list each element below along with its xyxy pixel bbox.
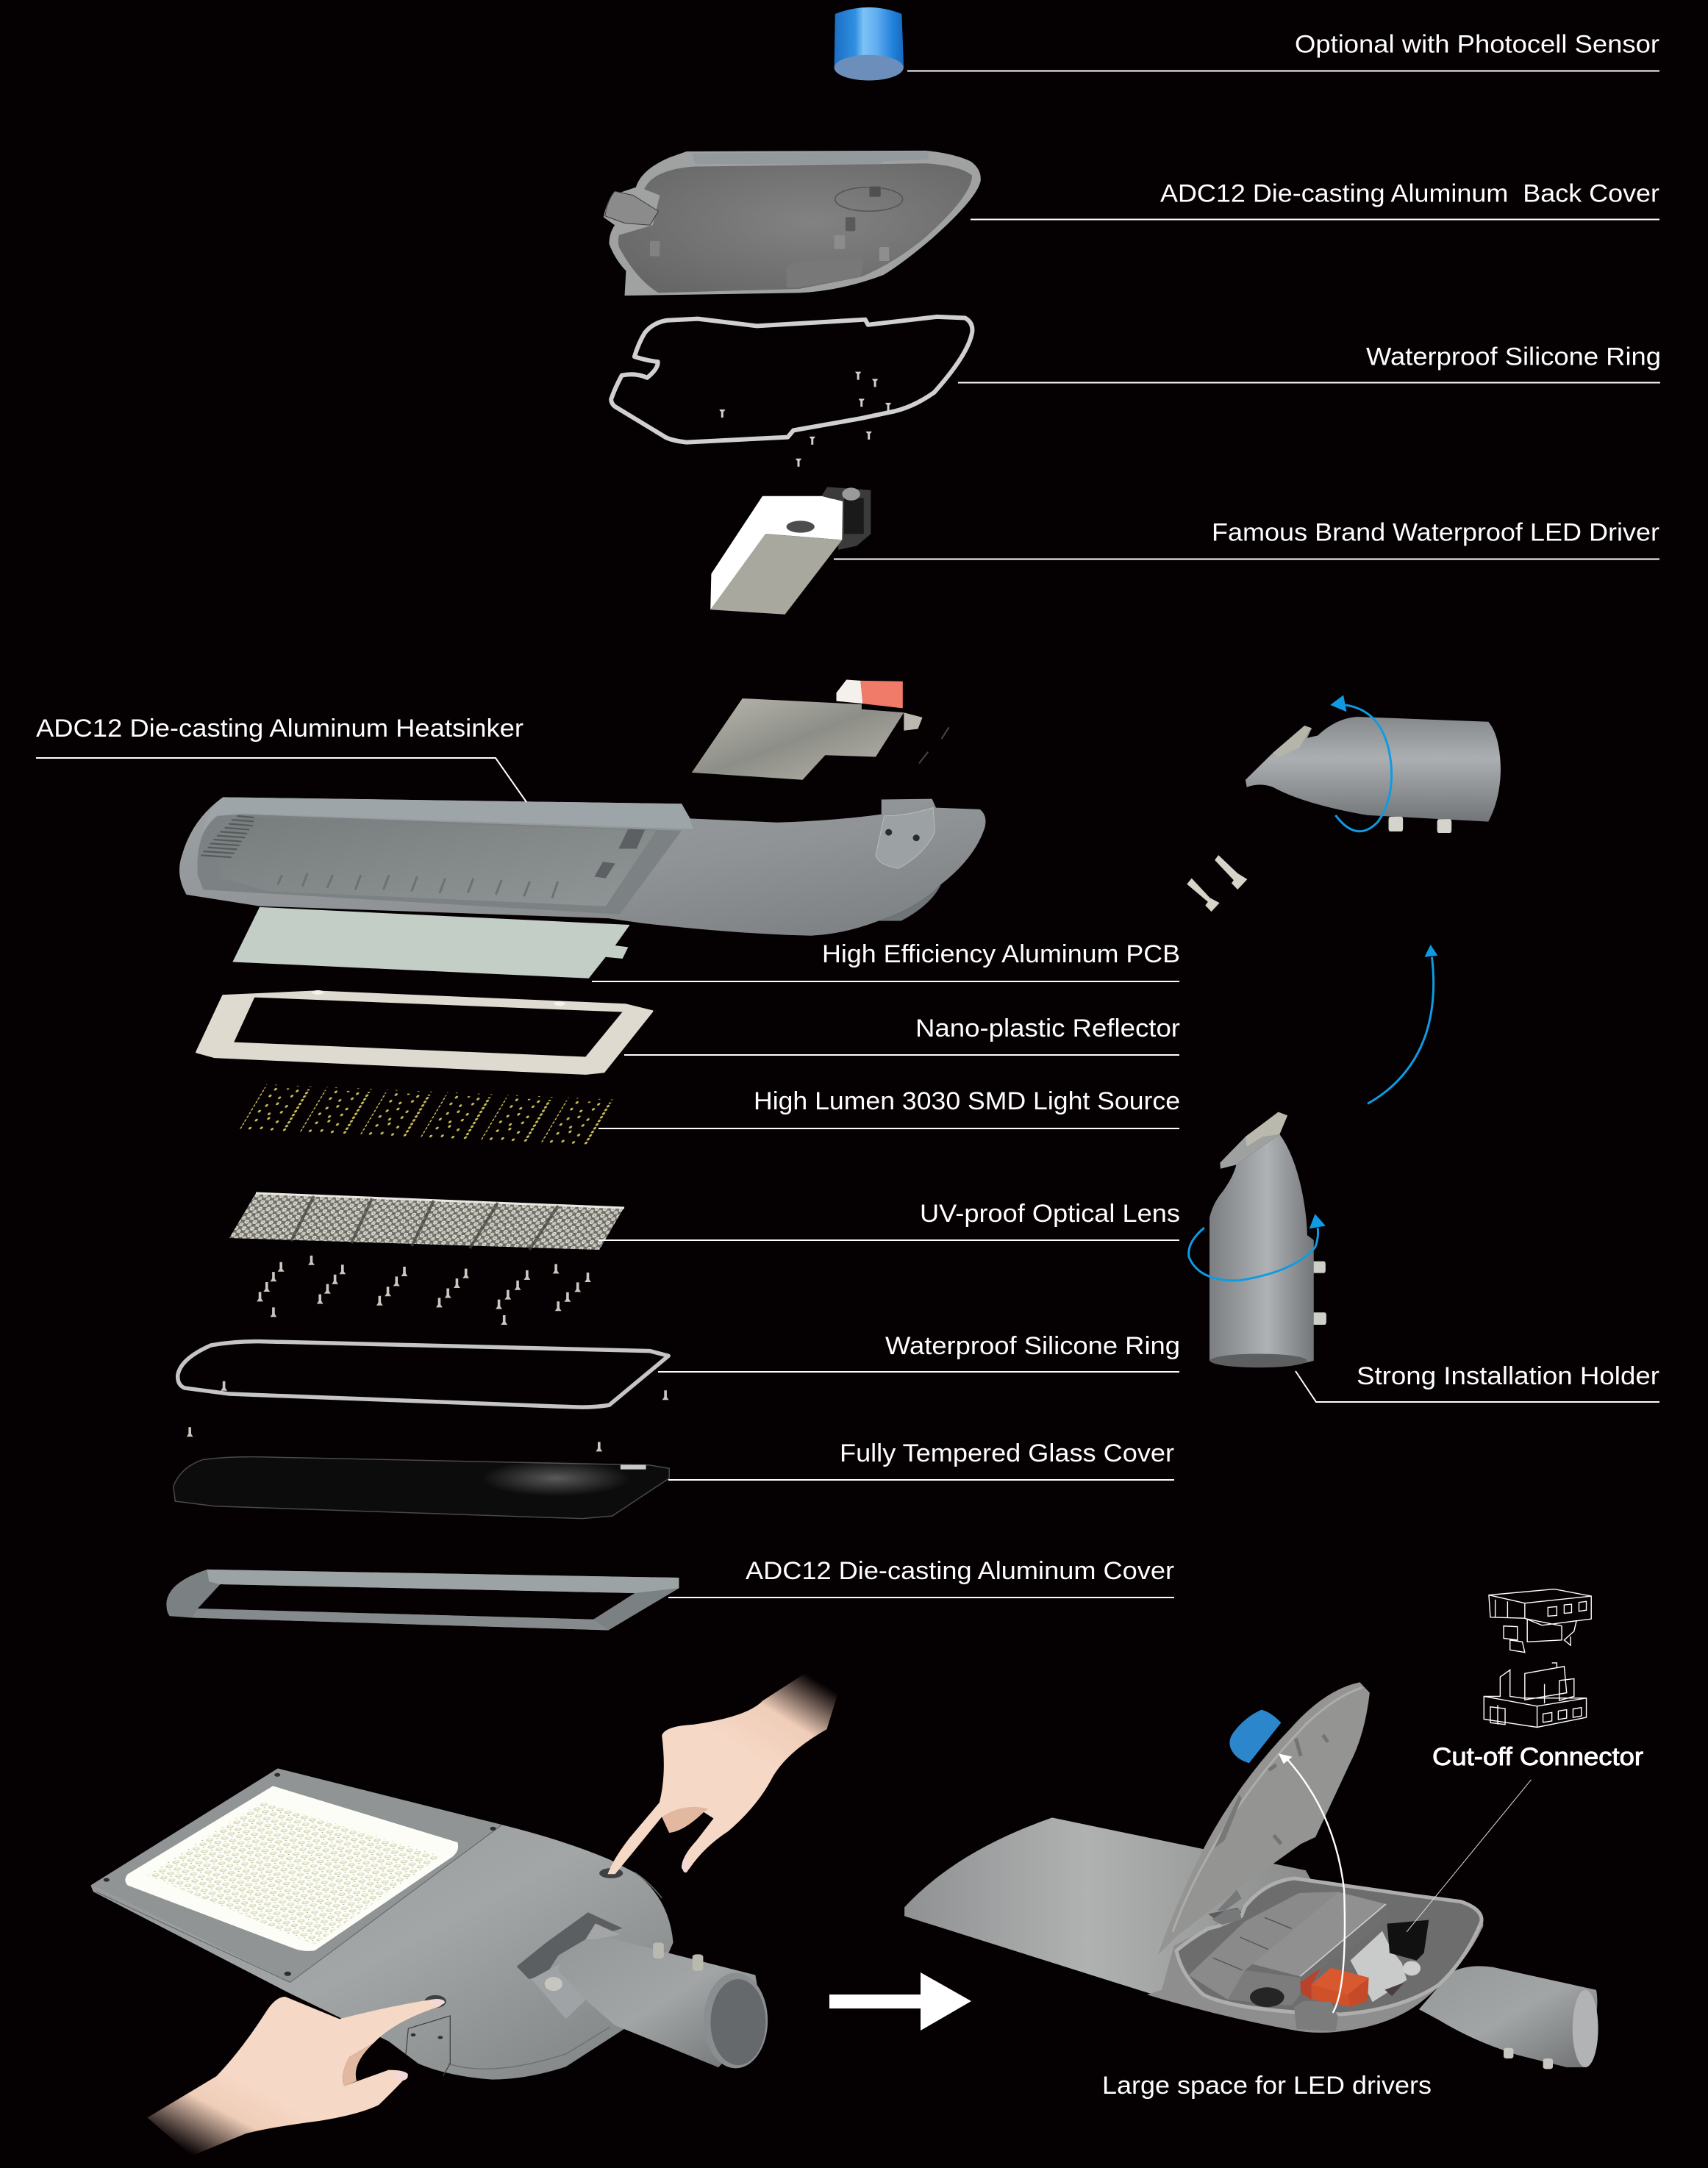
- finger hand lower: [147, 1997, 445, 2156]
- mounting recess: [517, 1912, 623, 1979]
- part: nano-plastic reflector: [196, 990, 652, 1074]
- mounting pipe: [1419, 1966, 1597, 2067]
- mounting pipe: [559, 1939, 762, 2067]
- part: aluminum PCB: [232, 907, 630, 979]
- label: LED driver: Famous Brand Waterproof LED Driver: [1212, 519, 1659, 547]
- icon: two mounting bolts: [1187, 855, 1247, 912]
- part: waterproof LED driver: [710, 487, 871, 615]
- red capacitor: [1300, 1968, 1321, 2000]
- part: aluminum back cover: [604, 151, 981, 296]
- flat heatsink panel: [904, 1817, 1311, 2031]
- heatsink vent fins: [201, 816, 254, 857]
- label: light source: High Lumen 3030 SMD Light Source: [754, 1087, 1180, 1115]
- part: horizontal installation holder with rotation arrow: [1246, 695, 1501, 833]
- part: UV-proof optical lens: [229, 1193, 624, 1250]
- luminaire body: [90, 1769, 673, 2080]
- part: aluminum heatsinker housing: [179, 797, 985, 936]
- label: aluminum PCB: High Efficiency Aluminum PCB: [822, 940, 1180, 968]
- icon: cut-off connector lower wireframe: [1484, 1663, 1587, 1727]
- label: heatsinker: [36, 715, 526, 802]
- label: photocell sensor: Optional with Photocell Sensor: [1295, 31, 1659, 59]
- arrow: blue rotation arc bottom: [1189, 1214, 1326, 1281]
- black cut-off connector: [1387, 1920, 1429, 1961]
- illustration: opened lid and connector details: [1158, 1589, 1591, 2013]
- white opening arrow: [1279, 1753, 1345, 2013]
- lens fixing screws: [187, 1256, 669, 1451]
- label: upper silicone ring: Waterproof Silicone Ring: [1366, 343, 1661, 371]
- icon: cut-off connector upper wireframe: [1489, 1589, 1591, 1653]
- illustration: opened luminaire base and pipe: [904, 1817, 1598, 2069]
- part: fully tempered glass cover: [174, 1457, 669, 1519]
- illustration: closed luminaire with two hands: [90, 1669, 846, 2156]
- label: aluminum cover: ADC12 Die-casting Aluminum Cover: [746, 1557, 1174, 1585]
- label: glass cover: Fully Tempered Glass Cover: [840, 1439, 1174, 1467]
- label: heatsinker: ADC12 Die-casting Aluminum Heatsinker: [36, 715, 524, 743]
- lid hinge: [1208, 1908, 1241, 1924]
- arrow: curved blue direction arrow: [1368, 945, 1437, 1103]
- label: cut-off connector: Cut-off Connector: [1432, 1743, 1643, 1771]
- part: SMD LED light source dots: [236, 1084, 619, 1146]
- luminaire LED array: [147, 1801, 440, 1945]
- open lid: [1158, 1682, 1370, 1955]
- label: large driver space: Large space for LED drivers: [1102, 2072, 1432, 2100]
- label: installation holder: Strong Installation Holder: [1357, 1362, 1659, 1390]
- label: back cover: ADC12 Die-casting Aluminum Back Cover: [1160, 179, 1659, 207]
- icon: blue photocell sensor: [835, 7, 904, 80]
- arrow: white transition arrow: [829, 1972, 971, 2031]
- screws around ring: [719, 372, 891, 467]
- opened housing interior with driver: [1147, 1877, 1483, 2033]
- driver box front: [1228, 1970, 1300, 2006]
- lower rim line: [448, 1872, 662, 2069]
- side latch panel: [406, 2016, 450, 2076]
- LED window: [125, 1786, 458, 1951]
- touch buttons: [424, 1868, 623, 2008]
- part: vertical installation holder with rotation arrow: [1189, 1112, 1326, 1367]
- lower screws and ring parts: [166, 1256, 679, 1630]
- silver PCB floor: [1351, 1931, 1407, 2002]
- driver box top: [1252, 1892, 1386, 1976]
- front hinge: [1294, 2001, 1338, 2031]
- silicone gasket: [1176, 1878, 1482, 2014]
- floor: [1189, 1892, 1338, 2000]
- label: installation holder: [1296, 1362, 1659, 1402]
- arrow: blue rotation arc top: [1330, 695, 1392, 831]
- part: aluminum front cover frame: [166, 1570, 679, 1630]
- part: upper waterproof silicone ring: [611, 317, 972, 467]
- finger hand upper: [608, 1669, 846, 1874]
- blue sensor behind lid: [1229, 1710, 1281, 1763]
- connector leader line: [1407, 1780, 1532, 1932]
- part: lower waterproof silicone ring: [178, 1342, 668, 1407]
- label: lower silicone ring: Waterproof Silicone Ring: [885, 1332, 1180, 1360]
- part: driver PCB plate with red capacitor: [692, 680, 949, 780]
- label: optical lens: UV-proof Optical Lens: [920, 1200, 1180, 1228]
- label: reflector: Nano-plastic Reflector: [915, 1015, 1180, 1042]
- housing shell: [1147, 1877, 1483, 2033]
